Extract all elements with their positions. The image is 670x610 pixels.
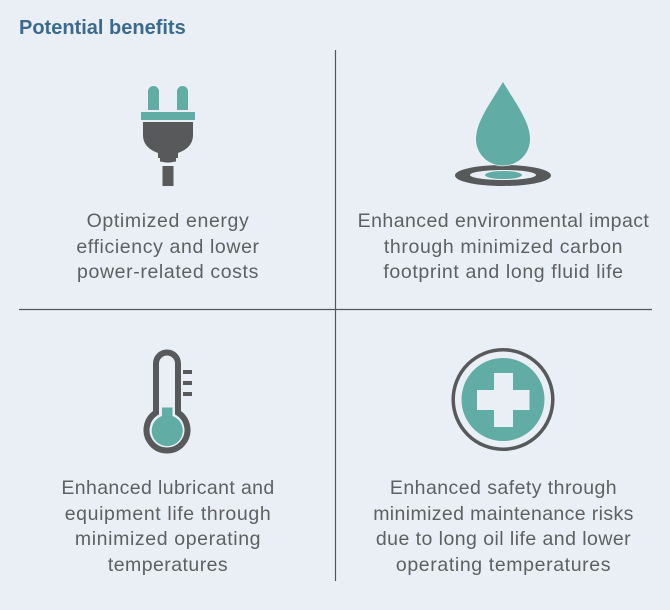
- text: energy efficiency: efficiency and lower: [76, 236, 260, 258]
- text: energy efficiency: Optimized energy: [87, 210, 249, 232]
- text: safety: [373, 477, 634, 576]
- text: safety: minimized maintenance risks: [373, 502, 634, 524]
- icon: thermometer: [146, 353, 192, 450]
- text: environmental impact: footprint and long fluid life: [383, 261, 624, 283]
- text: environmental impact: through minimized carbon: [384, 236, 623, 258]
- icon: medical cross: [453, 350, 553, 449]
- title: Potential benefits: [19, 17, 186, 39]
- text: lubricant and equipment life: [61, 477, 275, 576]
- text: energy efficiency: [76, 210, 260, 283]
- text: lubricant and equipment life: temperatures: [108, 554, 228, 576]
- text: safety: Enhanced safety through: [390, 477, 617, 499]
- text: energy efficiency: power-related costs: [77, 261, 259, 283]
- icon: oil drop: [455, 82, 551, 186]
- icon: plug: [141, 86, 195, 186]
- text: lubricant and equipment life: equipment life through: [65, 502, 271, 524]
- text: lubricant and equipment life: Enhanced lubricant and: [61, 477, 275, 499]
- text: safety: due to long oil life and lower: [376, 528, 631, 550]
- text: environmental impact: Enhanced environmental impact: [358, 210, 649, 232]
- text: safety: operating temperatures: [396, 554, 611, 576]
- text: environmental impact: [358, 210, 649, 283]
- text: lubricant and equipment life: minimized operating: [75, 528, 261, 550]
